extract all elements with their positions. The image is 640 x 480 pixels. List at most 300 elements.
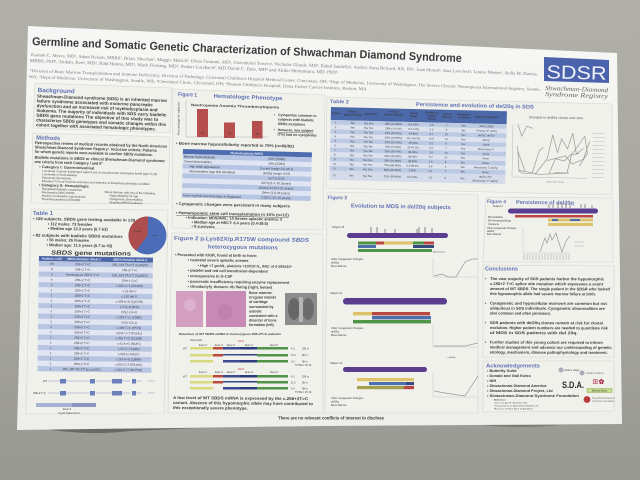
timeline: subject 3: Other Cytogenetic Changes <box>331 396 364 400</box>
table: SBDS gene mutations: c.3 G>A (M1I) <box>120 305 139 309</box>
panel: methods: • Category II: Hematologic <box>39 183 89 189</box>
panel: methods: • Category I: Gastrointestinal <box>39 165 94 170</box>
table: del20q persistence <box>329 107 507 184</box>
text: case presentation: • unresponsive to G-CSF <box>188 274 233 279</box>
table: del20q persistence: Yes <box>350 139 355 143</box>
table: SBDS gene mutations: 1 <box>50 335 52 339</box>
diagram: transcripts: 0 0 <box>291 388 295 390</box>
timeline: subject 3 <box>330 361 478 407</box>
table: del20q persistence: Yes Yes <box>364 121 374 125</box>
panel: methods <box>31 133 170 206</box>
diagram: transcripts: 4 3 <box>291 348 295 350</box>
line chart: del20q clones over time: Changes in del20q clones over time <box>529 115 583 120</box>
table: del20q persistence: 3.0 <box>430 123 434 127</box>
panel: conclusions <box>483 265 614 357</box>
logos: sponsors: Syndrome Foundation <box>592 400 615 403</box>
table: del20q persistence: Yes <box>461 156 466 160</box>
logo: SDSR: Syndrome Registry <box>545 91 608 100</box>
logo: SDSR <box>544 57 609 100</box>
text: conclusions: amount of WT SBDS. The single patient in the SDSR who lacked <box>490 286 611 291</box>
panel: methods: one criteria from each Category I and II² <box>34 159 103 166</box>
table: SBDS gene mutations: 258+2 T>C <box>75 304 91 308</box>
table: del20q persistence: Yes <box>460 170 465 174</box>
table: del20q persistence: Yes <box>461 151 466 155</box>
panel: methods: Retrospective review of medical records obtained by the North American <box>35 140 168 149</box>
table: del20q persistence: 0.2 <box>429 146 433 150</box>
table: del20q persistence: Yes <box>350 148 355 153</box>
table: myelodysplasia: trisomy 8 (10.3-21 years) <box>259 186 293 191</box>
table: del20q persistence: Monosomy 7*, del7q* <box>472 178 498 183</box>
text: cohort summary: • Median age: 11.5 years (0.7 to 53) <box>47 242 113 248</box>
table: del20q persistence: 38-45% <box>408 155 418 159</box>
text: cytopenia notes: SBDS mutations <box>278 122 305 127</box>
table: SBDS gene mutations: 258+2 T>C <box>74 325 91 329</box>
table: del20q persistence: Yes <box>460 160 466 165</box>
panel: table 1 <box>26 209 168 415</box>
table: del20q persistence: 75% (40-90%) <box>384 163 401 168</box>
affiliations: ¹Division of Bone Marrow Transplantation and Immune Deficiency, Division of Pathology, Cincinnati Children's Hospital Medical Center, Cincinnati, OH; ²Dept of Medicine, University of Washington, The Severe Chronic Neutropenia International Registry, Seattle, <box>30 68 541 93</box>
diagram: transcripts: WT <box>183 348 187 350</box>
text: funders: • Shwachman-Diamond Syndrome Foundation <box>487 393 580 398</box>
panel: methods: Dysplasia/MDS/Leukemia <box>109 200 143 205</box>
panel: methods: Hypoplastic/aplastic cytopenias <box>42 187 82 192</box>
logos: sponsors: Healthy Children <box>586 372 604 375</box>
authors <box>30 52 538 83</box>
logos: sponsors: S.D.A. <box>562 380 584 390</box>
table: SBDS gene mutations: 258+2 T>C <box>122 268 138 272</box>
table: SBDS gene mutations: 1 <box>50 367 52 371</box>
text: figure 2 conclusion: this exceptionally severe phenotype. <box>173 405 248 411</box>
heading: figure 4: Figure 4 <box>487 199 506 205</box>
table: del20q persistence: 0.2 <box>429 141 434 145</box>
table: del20q persistence: 7 <box>446 123 448 127</box>
table: del20q persistence: 70% (40-70%) <box>384 149 402 154</box>
diagram: transcripts: Exon 4 <box>245 371 253 374</box>
table: del20q persistence: 7 <box>445 169 447 173</box>
table: del20q persistence: del7q* <box>482 138 490 142</box>
table: del20q persistence: 6.2-69.3% <box>406 164 419 168</box>
table: del20q persistence: 3.6 <box>429 150 433 155</box>
table: del20q persistence: Monosomy 7* <box>478 147 494 151</box>
heading: figure 1 <box>178 92 283 102</box>
logos: sponsors: Jenn's Hope <box>564 368 580 372</box>
diagram: transcripts: TOTAL= 15 16 <box>295 391 312 394</box>
table: del20q persistence: 38-80% <box>408 159 418 163</box>
table: del20q persistence: Yes <box>349 158 355 162</box>
table: SBDS gene mutations: c.556 G (V52C) <box>118 352 139 356</box>
table: SBDS gene mutations: 258+2 T>C <box>74 341 90 345</box>
text: figure 1 findings: • Cytogenetic changes were persistent in many subjects <box>176 201 290 208</box>
table: del20q persistence: 25-47.3% <box>407 145 419 150</box>
heading: figure 1: Figure 1 <box>178 92 197 99</box>
table: SBDS gene mutations: c.458 A>G (Q153R) <box>116 300 143 304</box>
table: SBDS gene mutations: c.169 T>C (F57S) <box>117 326 141 330</box>
text: references: References <box>494 400 507 402</box>
bar chart: cytopenias: Neutropenia Anemia Thrombocytopenia <box>191 103 279 109</box>
timeline: subject 1: Other Cytogenetic Changes <box>331 257 364 261</box>
timeline: persistence: MS Hematopathology <box>488 220 512 222</box>
diagram: SBDS splicing: Cryptic Splice Donor <box>58 411 80 415</box>
diagram: transcripts: Exon 4 <box>245 344 253 347</box>
table: del20q persistence: Range <box>410 115 418 118</box>
text: funders: • Shwachman-Diamond Project, Ltd <box>487 388 553 393</box>
table: del20q persistence: del7q*, del7q* <box>478 133 495 138</box>
diagram: transcripts: Exon 3 <box>227 371 235 374</box>
table: SBDS gene mutations: SBDS Mutation Allele 1 <box>67 257 101 261</box>
text: funders <box>487 368 580 398</box>
table: del20q persistence: Yes <box>350 135 355 139</box>
text: figure 1 findings: • Median age at HSCT: 6.4 years (0.4-39.6) <box>192 219 269 226</box>
table: myelodysplasia: Age initial appearance <box>189 164 220 169</box>
table: del20q persistence: 3.68% <box>409 168 417 173</box>
text: conclusions: evolution. Higher patient numbers are needed to quantitate risk <box>490 325 609 330</box>
timeline: persistence <box>487 203 598 236</box>
diagram: transcripts: 98 nt <box>302 388 308 390</box>
table: del20q persistence: Trisomy 8*, del7q <box>476 129 497 133</box>
table: del20q persistence: 4 <box>334 134 337 138</box>
panel: methods: Hypocellularity for age <box>110 194 139 198</box>
timeline: subject 3: del20q <box>331 400 339 404</box>
table: SBDS gene mutations: 183_184 TA>CT (p.Lys62X) <box>62 367 101 372</box>
table: SBDS gene mutations: 1 <box>50 341 52 345</box>
table: myelodysplasia <box>182 149 312 201</box>
table: del20q persistence: 6 <box>446 128 448 132</box>
text: cytopenia notes: • <box>274 113 276 117</box>
panel: methods: Neutropenia (ANC<1500) <box>42 190 74 195</box>
diagram: transcripts: Transcripts <box>190 339 203 342</box>
text: bone marrow note: disorder of bone <box>249 319 277 323</box>
timeline: persistence: del20q <box>487 230 495 233</box>
table: SBDS gene mutations: 258+2 T>C <box>74 320 91 324</box>
text: references <box>494 400 539 410</box>
table: SBDS gene mutations: 258+2 T>C <box>75 283 91 287</box>
text: hypocellularity: • Bone marrow hypocellularity reported in 79% (n=65/82) <box>176 141 295 149</box>
table: del20q persistence: None <box>482 161 489 165</box>
table: del20q persistence: 16.1-54.2% <box>406 136 421 140</box>
table: SBDS gene mutations: 1 <box>50 314 52 318</box>
timeline: subject 1: Bone Marrow <box>331 264 347 268</box>
table: SBDS gene mutations: c.258 T>C (C86R) <box>117 315 142 320</box>
table: del20q persistence: Yes <box>461 124 466 128</box>
diagram: SBDS splicing: Exon 3 <box>63 407 72 411</box>
text: conclusions: c.258+2 T>C splice site mutation which expresses a scant <box>490 281 604 286</box>
text: funders: • Shwachman-Diamond America <box>487 383 547 388</box>
text: figure 2 conclusion: A low level of WT SBDS mRNA is expressed by the c.258+2T>C <box>173 395 308 401</box>
table: SBDS gene mutations: 1 <box>50 351 52 355</box>
heading: SBDS gene mutations: SBDS gene mutations <box>51 250 132 258</box>
panel: methods: Thrombocytopenia (<150,000) <box>41 197 80 202</box>
table: SBDS gene mutations: 258+2 T>C <box>74 346 90 350</box>
table: SBDS gene mutations: Hemizygous 258+2 T>C <box>66 273 100 277</box>
table: del20q persistence: 8.6-41% <box>409 122 419 127</box>
text: bone marrow note: of cartilage <box>249 300 268 304</box>
table: SBDS gene mutations: c.120 del G <box>122 294 138 299</box>
logos: sponsors: Shwachman-Diamond <box>592 398 615 400</box>
table: del20q persistence: 3.2 <box>430 127 434 132</box>
panel: methods: Low levels of serum trypsinogen (age<3 yrs) or low pancreatic isoamylase levels (age>3 yrs) <box>42 169 157 176</box>
table: SBDS gene mutations: 258+2 T>C <box>75 294 91 298</box>
text: bone marrow note: consistent with a <box>249 314 277 318</box>
table: del20q persistence: 6.0-3.0% <box>408 127 420 131</box>
table: del20q persistence: Yes <box>461 147 466 151</box>
table: del20q persistence: Yes Yes <box>363 140 374 144</box>
table: SBDS gene mutations: IVS3-1G>A <box>121 321 138 325</box>
table: del20q persistence: Yes Yes <box>363 149 373 153</box>
text: conclusions: etiology, mechanism, disease pathophysiology and treatment. <box>490 350 608 355</box>
diagram: transcripts: 98 nt <box>302 354 308 357</box>
table: SBDS gene mutations: c.355 T>C (C119R) <box>116 336 142 341</box>
table: del20q persistence: 23 <box>444 155 448 159</box>
panel: background: Background <box>38 87 75 95</box>
text: conclusions: • <box>485 276 487 281</box>
table: SBDS gene mutations: 1 <box>50 362 52 366</box>
timeline: subject 3: Bone Marrow <box>331 403 347 407</box>
table: del20q persistence: 3.4 <box>429 164 433 168</box>
panel: methods: Methods <box>36 136 61 142</box>
text: cytopenia notes: However, one subject <box>278 128 314 133</box>
image: chest x-ray <box>285 293 317 325</box>
panel: acknowledgements <box>483 361 615 412</box>
panel: background: cohort together with associated hematologic phenotypes. <box>36 122 156 131</box>
table: del20q persistence: 28% (10-60%) <box>384 159 401 163</box>
diagram: transcripts: Exon 2 <box>199 371 207 374</box>
diagram: transcripts: WT <box>183 376 187 378</box>
table: del20q persistence: 8 <box>334 153 336 157</box>
table: del20q persistence: 6 <box>445 142 447 146</box>
table: del20q persistence: Yes <box>460 176 465 180</box>
text: references: ³Bari et al. J Pediatr 2013; 164(2):434-6 <box>494 408 533 410</box>
table: del20q persistence: 11 <box>333 166 336 171</box>
diagram: transcripts: Exon 3 <box>227 344 235 347</box>
table: del20q persistence: (years) <box>428 117 436 121</box>
panel: methods: Pancreatic lipomatosis <box>42 176 72 180</box>
table: myelodysplasia: del20q (range 0-23) <box>263 171 290 176</box>
table: del20q persistence: 10 <box>333 162 337 166</box>
text: conclusions <box>485 276 613 355</box>
table: SBDS gene mutations: 258+2 T>C <box>74 330 90 335</box>
table: del20q persistence: None <box>483 156 490 160</box>
heading: table 2 <box>330 99 534 111</box>
diagram: transcripts: Exon 2 <box>199 344 207 347</box>
text: cohort summary: • Median age 12.3 years (0.7-53) <box>48 226 108 232</box>
text: figure 2 conclusion: variant. Absence of this hypomorphic allele may have contributed to <box>173 400 313 406</box>
table: SBDS gene mutations: 258+2 T>C <box>75 278 91 282</box>
table: myelodysplasia: iso7q (10.6) <box>268 176 284 181</box>
table: del20q persistence: None <box>482 170 489 174</box>
panel: methods: Anemia or idiopathic macrocytosis <box>41 194 86 199</box>
panel: figure 2 <box>168 233 323 413</box>
table: del20q persistence: 53% (30-60%) <box>385 131 402 135</box>
table: del20q persistence: Yes <box>350 121 356 125</box>
text: cohort summary: • 82 subjects with biallelic SBDS mutations <box>33 232 124 239</box>
text: conclusions: also common and often persistent. <box>490 311 551 316</box>
timeline: subject 1: Monosomy 7 <box>433 252 446 254</box>
table: del20q persistence: Age at <box>443 113 451 116</box>
table: SBDS gene mutations: c.523 C>T (R175W) <box>115 368 142 372</box>
timeline: persistence: Cytopenia <box>488 223 499 226</box>
heading: figure 2: heterozygous mutations <box>208 244 278 251</box>
text: case presentation: • Presented with IUGR, found at birth to have: <box>175 253 257 258</box>
table: del20q persistence: Yes <box>349 167 354 171</box>
table: del20q persistence: Yes <box>461 137 466 142</box>
table: del20q persistence: Yes Yes <box>364 126 374 130</box>
heading: figure 2 <box>174 236 309 252</box>
text: conclusions: ubiquitous in SDS individuals. Cytogenetic abnormalities are <box>490 306 606 311</box>
panel: methods: Biallelic mutations in SBDS or clinical Shwachman-Diamond syndrome: <box>35 155 166 163</box>
table: del20q persistence: 13 <box>444 151 448 155</box>
panel: methods: Elevated 72 hour fecal fat excretion and absence of intestinal pathologic condition <box>42 179 150 186</box>
diagram: transcripts: TOTAL= 15 16 <box>295 364 312 367</box>
table: del20q persistence: Yes Yes <box>363 144 373 148</box>
table: myelodysplasia: 58% (35/60) <box>268 157 285 161</box>
pie chart <box>128 216 166 254</box>
affiliations: WA; ²Dept of Medicine, University of Washington, Seattle, WA; ³Cleveland Clinic, Cleveland, OH; ⁴Boston Children's Hospital, Dana Farber Cancer Institute, Boston, MA <box>29 74 367 92</box>
panel: background <box>33 83 172 133</box>
diagram: transcripts: 98 nt <box>302 382 308 384</box>
table: SBDS gene mutations: c.385 C>T (R129C) <box>116 284 143 288</box>
timeline: subject 3: Subject 10 <box>330 361 343 365</box>
table: SBDS gene mutations: SBDS Mutation Allele 2 <box>113 258 147 262</box>
timeline: subject 1: del20q <box>331 260 339 264</box>
heading: table 2: Persistence and evolution of del20q in SDS <box>416 102 534 111</box>
heading: figure 4 <box>487 199 574 207</box>
text: cohort summary <box>33 216 136 249</box>
text: cohort summary: • 56 males; 26 females <box>47 237 90 243</box>
heading: figure 1: Hematologic Phenotype <box>213 94 283 102</box>
table: del20q persistence: del20 EIF6 <box>365 113 378 116</box>
timeline: persistence: Subject 2 <box>493 205 504 208</box>
table: del20q persistence: 64-80% <box>409 132 419 136</box>
table: del20q persistence: 8 <box>445 160 447 164</box>
table: del20q persistence: 25% (20-30%) <box>385 140 402 145</box>
text: conclusions: of MDS in SDS patients with del 20q. <box>490 330 578 335</box>
table: del20q persistence: 5.7 <box>429 155 433 159</box>
table: SBDS gene mutations: 1 <box>51 293 53 297</box>
panel: background: failure syndrome associated with exocrine pancreatic <box>37 98 153 107</box>
heading: figure 3 <box>328 195 451 211</box>
table: SBDS gene mutations: c.41 A>G (N14S) <box>117 342 141 346</box>
text: case presentation: • clinodactyly, thoracic rib flaring (right, below) <box>188 285 273 290</box>
text: figure 1 findings: • Hematopoietic stem cell transplantation in 15% (n=12) <box>176 210 290 217</box>
table: myelodysplasia: Myelodysplasia (MDS) <box>231 151 263 156</box>
text: figure 1 findings: • 9 survivors <box>191 224 215 229</box>
table: del20q persistence: None <box>483 152 490 156</box>
table: del20q persistence: 0.2 <box>429 169 433 173</box>
table: myelodysplasia: Abnormalities (age first identified) <box>189 169 235 174</box>
table: SBDS gene mutations: 258+1 G>C <box>122 279 138 283</box>
table: del20q persistence: 12 <box>333 173 336 177</box>
logos: sponsors: ꕥ✿ <box>592 378 604 386</box>
text: references: ²Cesaro Dale et al. Blood 2001;114(3):661-70 <box>494 404 539 408</box>
text: conclusions: medical management and advance our understanding of genetic <box>490 345 613 350</box>
table: SBDS gene mutations: 1 <box>50 304 52 308</box>
table: del20q persistence: Clonal <box>410 112 418 115</box>
text: funders: • NIH <box>487 378 496 383</box>
text: funders: • Donald and Gail Kolss <box>487 373 531 378</box>
line chart: del20q clones over time <box>512 115 605 185</box>
diagram: transcripts: Exon 5 <box>270 344 278 347</box>
table: del20q persistence: Marrow <box>348 110 357 114</box>
text: figure 1 findings: • Indication: MDS/AML: 10 Severe aplastic anemia: 2 <box>186 215 283 222</box>
table: del20q persistence: 28% (>10-60) <box>385 126 402 131</box>
table: SBDS gene mutations: 1 <box>50 346 52 350</box>
table: SBDS gene mutations: 258+2 T>C <box>75 299 91 303</box>
text: case presentation: • platelet and red cell transfusion-dependent <box>188 269 269 274</box>
text: conclusions: The vast majority of SDS patients harbor the hypomorphic <box>490 276 605 281</box>
table: del20q persistence: Yes <box>461 142 466 146</box>
diagram: transcripts: 98 nt <box>302 360 308 364</box>
heading: figure 4: Persistence of del20q <box>516 200 574 207</box>
panel: background: leukemia. The majority of individuals with SDS carry biallelic <box>36 108 167 117</box>
table: del20q persistence: Yes <box>350 125 355 130</box>
table: del20q persistence: Yes Yes <box>364 130 374 135</box>
timeline: persistence: MS Cellularity <box>488 216 504 219</box>
table: del20q persistence: del7q, i(9)q* <box>479 124 494 128</box>
line chart: del20q clones over time: Years from clone <box>546 181 565 184</box>
table: del20q persistence: Monosomy 7, del7q <box>474 165 498 170</box>
table: del20q persistence: Yes Yes <box>363 167 373 171</box>
table: del20q persistence: 43% (10-80%) <box>385 136 402 140</box>
table: del20q persistence: Persistence <box>457 113 472 116</box>
diagram: transcripts: R419 <box>238 340 245 343</box>
line chart: del20q persistence <box>523 228 584 260</box>
diagram: transcripts: Exon 5 <box>270 371 278 374</box>
diagram: transcripts: R419 <box>238 368 245 371</box>
table: SBDS gene mutations: c.25 C>T (Q9X) <box>118 347 140 351</box>
table: SBDS gene mutations: 258+2 T>C <box>75 289 91 293</box>
table: myelodysplasia: 3 (18.5, 36, 39 years) <box>261 195 291 200</box>
table: SBDS gene mutations: 1 <box>50 320 52 324</box>
table: SBDS gene mutations: 183_184 TA>CT (Lys62X) <box>112 263 148 267</box>
table: SBDS gene mutations: 68 <box>50 262 54 266</box>
text: figure 1 findings <box>175 201 290 231</box>
table: SBDS gene mutations: 258+2 T>C <box>74 362 90 366</box>
logos: sponsors <box>558 368 615 403</box>
text: conclusions: SDS patients with del20q clones remain at risk for clonal <box>490 320 603 325</box>
table: del20q persistence: Yes <box>350 144 355 148</box>
text: bone marrow note: osteoid <box>249 309 261 313</box>
text: case presentation: • High <7 gm/dL, platelets <10X10⁹/L, ANC of 0-200X10⁹ <box>198 264 293 269</box>
heading: figure 2: Figure 2 p.Lys62X/p.R175W compound SBDS <box>174 236 309 244</box>
table: SBDS gene mutations: c.18 del C <box>123 289 137 293</box>
table: del20q persistence: Yes <box>350 130 355 134</box>
timeline: subject 2: Subject 11 <box>330 291 343 295</box>
timeline: subject 1 <box>331 225 478 277</box>
diagram: transcripts: 259 nt <box>302 376 309 378</box>
table: del20q persistence: del20q <box>428 114 436 118</box>
table: SBDS gene mutations: 1 <box>50 356 52 360</box>
text: cytopenia notes <box>273 113 317 138</box>
text: conclusions: • <box>485 339 487 345</box>
text: references: ¹Dror et al. Ann N Y Acad Sci 2011 <box>494 402 528 404</box>
table: del20q persistence: None <box>483 143 490 147</box>
table: del20q persistence: 7 <box>445 146 447 150</box>
table: del20q persistence: 38% (10-80%) <box>385 122 402 126</box>
diagram: transcripts: Exon 3 <box>215 344 223 347</box>
panel: figure 4 <box>483 197 613 262</box>
table: SBDS gene mutations: c.652 C>T (R218X) <box>115 363 142 367</box>
timeline: subject 1: Subject 16 <box>332 225 345 229</box>
diagram: transcripts: 0 0 <box>291 360 295 364</box>
logo: SDSR: SDSR <box>546 62 607 85</box>
diagram: transcripts: 11 0 <box>291 354 296 357</box>
table: del20q persistence: 46% (30-60%) <box>384 154 402 158</box>
table: del20q persistence: Yes Yes <box>363 174 373 178</box>
panel: table 2 <box>326 97 612 195</box>
table: del20q persistence: Yes Yes <box>363 158 373 162</box>
panel: background: dysfunction and an increased risk of myelodysplasia and <box>37 103 158 112</box>
table: SBDS gene mutations: 1 <box>50 299 53 303</box>
